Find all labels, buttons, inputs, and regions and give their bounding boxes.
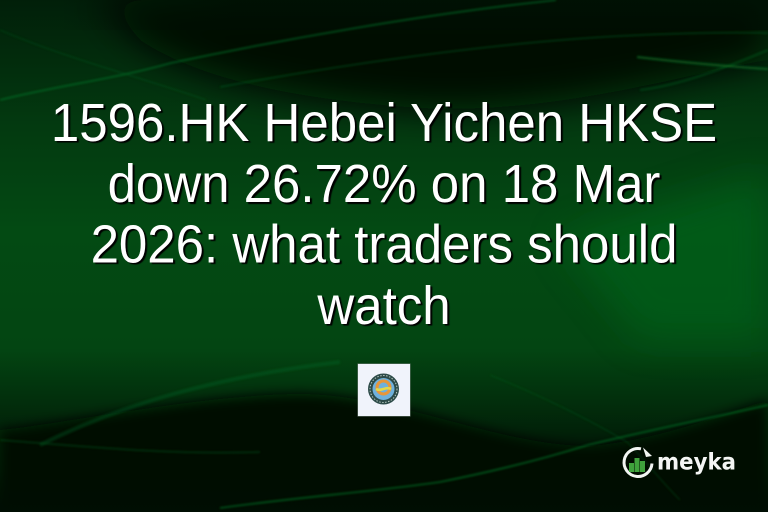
title: 2026: what traders should <box>91 214 677 275</box>
icon: ring with green bars <box>624 448 652 476</box>
title: down 26.72% on 18 Mar <box>108 153 660 214</box>
company logo badge <box>358 364 410 416</box>
title: watch <box>317 275 451 336</box>
title: 1596.HK Hebei Yichen HKSE <box>51 92 717 152</box>
title <box>51 92 718 336</box>
wordmark: meyka <box>657 450 736 476</box>
meyka logo <box>622 447 736 478</box>
